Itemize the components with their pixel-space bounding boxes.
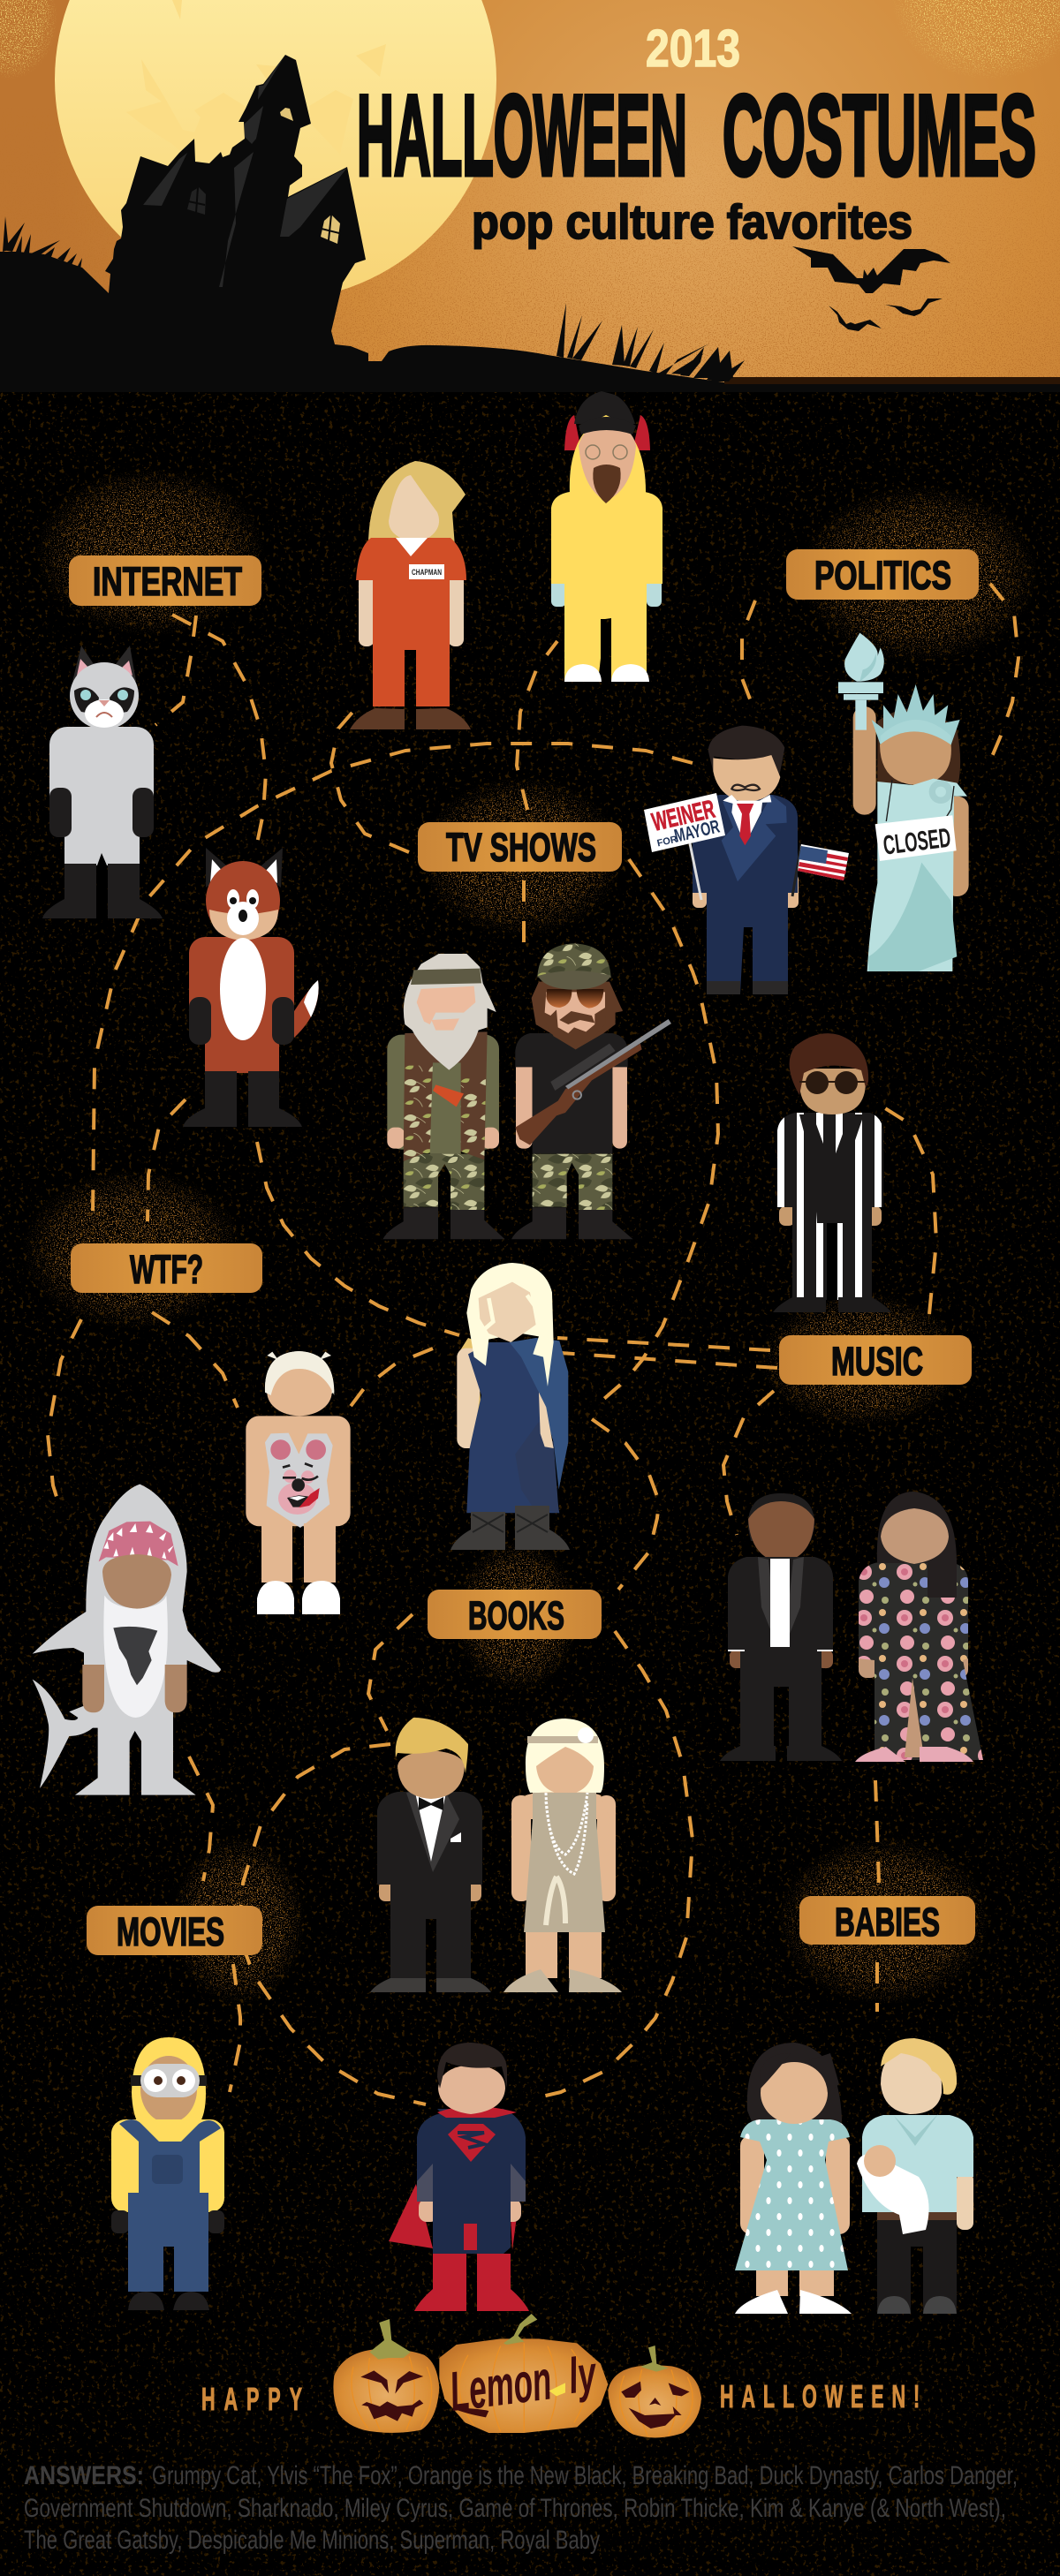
label: WTF [71, 1243, 262, 1293]
figure: Ylvis fox [183, 848, 319, 1127]
dashed connector paths [48, 584, 1018, 2104]
figure: Piper Chapman [350, 461, 471, 729]
figure: Daenerys [450, 1263, 570, 1550]
pumpkin: Lemonly logo [439, 2314, 608, 2433]
figure: Piper Chapman: CHAPMAN [412, 568, 442, 577]
figure: Carlos Danger: FOR [656, 835, 678, 849]
pumpkin: Lemonly logo: Lemon [446, 2349, 555, 2423]
figure: Statue of Liberty [838, 633, 1009, 971]
figure: Kim Kardashian [855, 1492, 983, 1762]
figure: Sharknado [33, 1484, 221, 1795]
figure: Superman [389, 2043, 529, 2311]
grass [3, 216, 745, 381]
label: Politics: POLITICS [814, 553, 951, 598]
label: Music: MUSIC [831, 1339, 923, 1384]
bats [792, 246, 950, 331]
answers [24, 2461, 1018, 2555]
header corner speckles [0, 0, 1060, 79]
text: happy: HAPPY [201, 2382, 302, 2417]
label: Books: BOOKS [468, 1593, 564, 1638]
figure: Heisenberg [551, 391, 662, 682]
label: WTF: WTF? [130, 1247, 203, 1292]
text: halloween: HALLOWEEN! [720, 2379, 920, 2414]
label: Internet: INTERNET [93, 559, 242, 604]
header sky [0, 0, 1060, 389]
figure: Grumpy Cat [42, 646, 163, 918]
figure: Prince William with baby [857, 2038, 973, 2314]
figure: Minion [111, 2037, 224, 2310]
speckle glows [22, 468, 1038, 2005]
haunted house and ground silhouette [0, 55, 1060, 392]
label: Internet [69, 555, 261, 606]
label: TV Shows: TV SHOWS [446, 825, 596, 870]
pumpkin: right [608, 2346, 701, 2437]
figure: Gatsby [370, 1718, 491, 1992]
figure: Duck Dynasty [382, 954, 505, 1239]
pumpkin: left [333, 2319, 439, 2433]
figure: Kate with royal baby [735, 2043, 852, 2314]
label: TV Shows [418, 822, 622, 872]
figure: Robin Thicke [773, 1033, 891, 1312]
figure: Daisy Buchanan [504, 1719, 622, 1992]
figure: Miley Cyrus [246, 1351, 351, 1614]
figure: Statue of Liberty: CLOSED [882, 823, 952, 861]
figure: Carlos Danger: WEINER [649, 795, 717, 837]
figure: Kanye West [720, 1493, 842, 1761]
sky grain [0, 106, 1060, 389]
answers: The Great Gatsby, Despicable Me Minions, Superman, Royal Baby [24, 2526, 600, 2555]
year: 2013 [646, 19, 740, 78]
subtitle: pop culture favorites [472, 194, 912, 249]
pumpkin: Lemonly logo: ly [565, 2346, 601, 2405]
moon [55, 0, 496, 300]
label: Movies: MOVIES [117, 1909, 224, 1954]
figure: Carlos Danger: MAYOR [672, 817, 722, 847]
label: Books [428, 1590, 602, 1639]
answers: ANSWERS: [24, 2461, 144, 2490]
figure: Duck Dynasty hunter [511, 943, 671, 1239]
figure: Carlos Danger [644, 726, 849, 994]
label: Babies: BABIES [835, 1900, 940, 1945]
label: Music [779, 1335, 972, 1385]
